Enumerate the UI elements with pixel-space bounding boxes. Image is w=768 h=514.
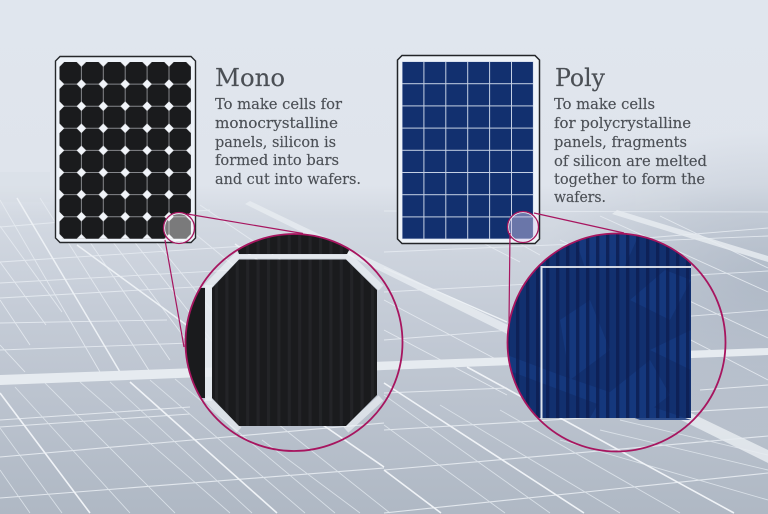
connector lines	[509, 213, 624, 322]
polycrystalline cell grid	[402, 62, 533, 239]
mono panel thumbnail	[56, 56, 196, 242]
text: mono description: and cut into wafers.	[215, 172, 361, 188]
text: poly description: wafers.	[554, 190, 606, 206]
monocrystalline cell grid	[60, 62, 191, 239]
text: poly description: together to form the	[554, 172, 705, 188]
panel frame	[56, 56, 196, 242]
text: mono description: formed into bars	[215, 153, 339, 169]
text: poly description: To make cells	[554, 97, 655, 113]
text: mono description: panels, silicon is	[215, 135, 336, 151]
poly panel thumbnail	[398, 56, 540, 244]
text: poly description: of silicon are melted	[554, 154, 707, 170]
large lens ring	[508, 234, 726, 452]
poly magnifier	[500, 212, 726, 452]
text: poly description: for polycrystalline	[554, 116, 691, 132]
text: poly description	[554, 97, 707, 206]
text: mono description: To make cells for	[215, 97, 342, 113]
text: poly description: panels, fragments	[554, 135, 687, 151]
connector lines	[165, 214, 303, 347]
mono magnifier	[164, 212, 402, 451]
heading: Poly: Poly	[555, 64, 605, 92]
heading: Mono: Mono	[215, 64, 285, 92]
enlarged mono cell	[180, 230, 381, 430]
enlarged poly cell	[500, 225, 691, 420]
text: mono description: monocrystalline	[215, 116, 338, 132]
text: mono description	[215, 97, 361, 188]
large lens ring	[186, 234, 402, 451]
small lens on mono panel	[164, 212, 194, 244]
panel frame	[398, 56, 540, 244]
small lens on poly panel	[508, 212, 538, 242]
